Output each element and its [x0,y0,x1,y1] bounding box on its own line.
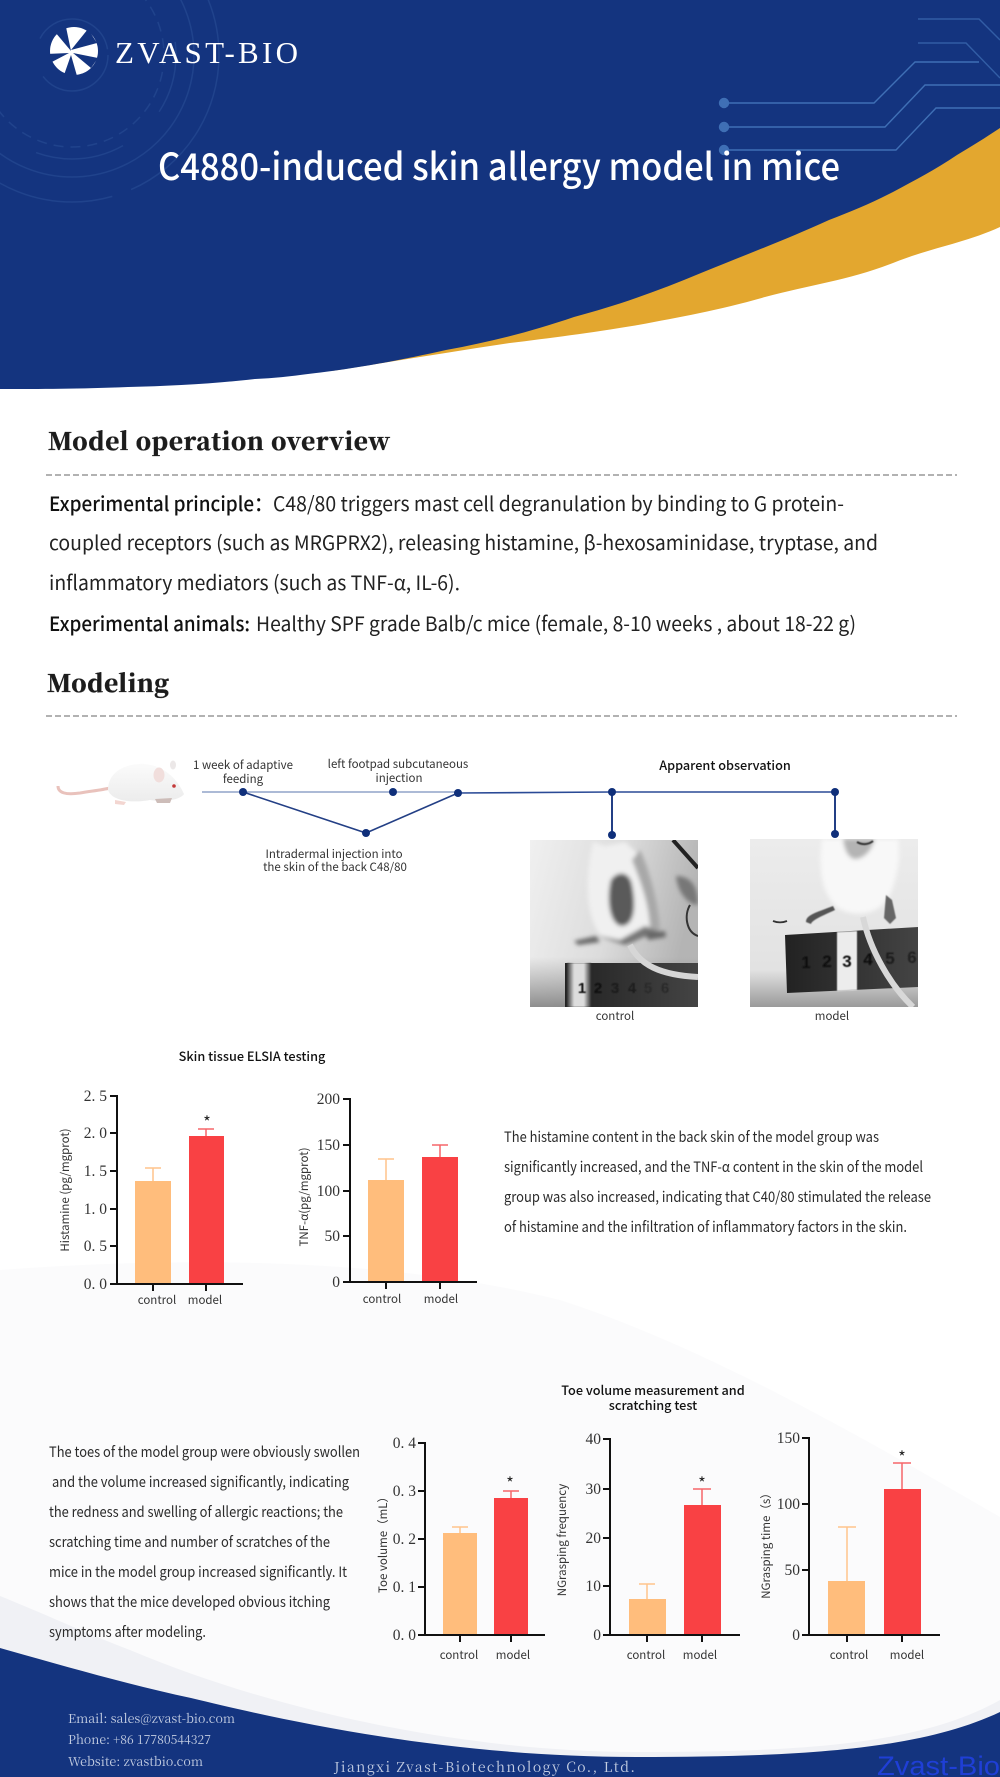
bar chart: toe volume: 0. 3 [393,1483,416,1500]
text block: experimental principle: coupled receptors (such as MRGPRX2), releasing histamine, β-hexosaminidase, tryptase, and [49,527,878,556]
bar chart: toe volume: control [440,1647,478,1663]
ruler numbers: 3 [611,980,619,997]
bar chart: grasping frequency: 30 [586,1481,601,1498]
header banner [0,0,1000,389]
text block: ELISA findings: The histamine content in the back skin of the model group was [504,1126,879,1147]
heading: toe volume and scratching [561,1380,745,1414]
ruler numbers: 5 [644,980,652,997]
heading: toe volume and scratching: Toe volume measurement and [561,1380,745,1399]
bar chart: TNF-alpha: model [424,1291,458,1307]
page background hill [0,1262,1000,1777]
text block: toe findings: symptoms after modeling. [49,1621,206,1642]
bar chart: grasping time: model [890,1647,924,1663]
bar chart: toe volume: Toe volume（mL） [375,1491,391,1593]
text block: toe findings: The toes of the model group were obviously swollen [49,1441,360,1462]
bar chart: grasping frequency: model [683,1647,717,1663]
gold swoosh [332,128,1000,371]
ruler numbers: 3 [842,952,852,971]
text block: toe findings [49,1441,360,1642]
timeline label: footpad injection [328,756,468,786]
bar chart: TNF-alpha: 200 [317,1091,340,1108]
bar chart: histamine: Histamine (pg/mgprot) [57,1128,73,1252]
ruler numbers: 2 [822,952,832,971]
ruler numbers: 2 [594,980,602,997]
timeline label: adaptive feeding [193,757,293,787]
photo: control mouse [530,840,698,1007]
text block: toe findings: mice in the model group increased significantly. It [49,1561,347,1582]
text block: ELISA findings [504,1126,931,1237]
bar chart: histamine: model [188,1292,222,1308]
heading: modeling: Modeling [47,664,169,699]
bar chart: histamine [57,1088,243,1308]
timeline label: footpad injection: left footpad subcutaneous [328,756,468,772]
ruler numbers: 4 [863,950,873,969]
caption: control: control [596,1008,634,1024]
bar chart: grasping frequency: * [698,1470,706,1494]
ruler numbers: 6 [661,980,669,997]
bar chart: TNF-alpha: control [363,1291,401,1307]
ruler numbers: 1 [801,953,811,972]
timeline label: adaptive feeding: 1 week of adaptive [193,757,293,773]
footer contact details: Phone: +86 17780544327 [68,1730,211,1748]
text block: experimental principle [49,488,878,596]
bar chart: grasping time [758,1430,940,1663]
bar chart: grasping time: 100 [777,1496,800,1513]
bar chart: toe volume: 0. 4 [393,1435,416,1452]
bar chart: toe volume: 0. 0 [393,1627,416,1644]
ruler numbers: 5 [885,949,895,968]
footer company name: Jiangxi Zvast-Biotechnology Co., Ltd. [333,1757,635,1777]
bar chart: toe volume [375,1435,545,1663]
text block: toe findings: shows that the mice developed obvious itching [49,1591,330,1612]
timeline label: intradermal injection: Intradermal injection into [265,846,403,862]
bar chart: grasping frequency: NGrasping frequency [554,1484,570,1596]
text block: ELISA findings: group was also increased, indicating that C40/80 stimulated the release [504,1186,931,1207]
timeline label: adaptive feeding: feeding [223,771,264,787]
logo icon [46,27,98,76]
bar chart: grasping time: NGrasping time（s） [758,1487,774,1599]
bar chart: grasping frequency: 40 [586,1431,601,1448]
bar chart: grasping time: * [898,1444,906,1468]
text block: toe findings: the redness and swelling of allergic reactions; the [49,1501,343,1522]
icon: white mouse [58,760,184,805]
ruler numbers: 1 [578,980,586,997]
bar chart: histamine: 1. 0 [84,1201,107,1218]
bar chart: toe volume: 0. 1 [393,1579,416,1596]
text block: experimental principle: inflammatory mediators (such as TNF-α, IL-6). [49,567,460,596]
bar chart: TNF-alpha: TNF-α(pg/mgprot) [296,1148,312,1246]
bar chart: grasping frequency: 10 [586,1578,601,1595]
bar chart: TNF-alpha [296,1091,477,1307]
header decorative rings [0,0,219,202]
bar chart: TNF-alpha: 100 [317,1183,340,1200]
bar chart: grasping time: 50 [784,1562,800,1579]
bar chart: histamine: control [138,1292,176,1308]
bar chart: histamine: 2. 0 [84,1125,107,1142]
bar chart: grasping frequency: 20 [586,1530,601,1547]
bar chart: TNF-alpha: 50 [324,1228,340,1245]
ruler numbers [578,982,669,994]
logo wordmark: ZVAST-BIO [115,35,298,70]
ruler numbers: 4 [628,980,637,997]
footer contact details [68,1709,235,1770]
bar chart: histamine: * [203,1109,211,1133]
timeline label: intradermal injection [263,846,407,875]
text block: experimental animals: Experimental animals: [49,608,250,637]
title: C4880-induced skin allergy model in mice [158,137,840,191]
caption: model: model [815,1008,849,1024]
ruler numbers: 6 [907,948,917,967]
footer contact details: Website: zvastbio.com [68,1752,203,1770]
bar chart: histamine: 0. 0 [84,1276,107,1293]
heading: skin tissue ELISA testing: Skin tissue ELSIA testing [179,1046,326,1065]
heading: model operation overview: Model operation overview [48,422,391,457]
bar chart: TNF-alpha: 150 [317,1137,340,1154]
bar chart: histamine: 1. 5 [84,1163,107,1180]
bar chart: grasping time: 0 [792,1627,800,1644]
timeline [202,788,839,839]
bar chart: TNF-alpha: 0 [332,1274,340,1291]
text block: experimental animals: Healthy SPF grade Balb/c mice (female, 8-10 weeks , about 18-22 g) [256,608,856,637]
photo: model mouse [750,839,918,1007]
heading: toe volume and scratching: scratching test [609,1395,697,1414]
heading: apparent observation: Apparent observation [659,755,791,774]
timeline label: intradermal injection: the skin of the back C48/80 [263,859,407,875]
footer band [0,1596,1000,1777]
text block: toe findings: scratching time and number of scratches of the [49,1531,330,1552]
text block: experimental principle: C48/80 triggers mast cell degranulation by binding to G protein- [273,488,844,517]
bar chart: grasping time: control [830,1647,868,1663]
bar chart: grasping time: 150 [777,1430,800,1447]
text block: ELISA findings: of histamine and the infiltration of inflammatory factors in the skin. [504,1216,907,1237]
bar chart: toe volume: 0. 2 [393,1531,416,1548]
timeline label: footpad injection: injection [376,770,422,786]
bar chart: histamine: 2. 5 [84,1088,107,1105]
circuit lines [720,19,1000,154]
bar chart: grasping frequency: 0 [593,1627,601,1644]
text block: toe findings: and the volume increased significantly, indicating [52,1471,349,1492]
text block: experimental principle: Experimental principle： [49,488,273,517]
ruler numbers [802,951,916,968]
bar chart: histamine: 0. 5 [84,1238,107,1255]
bar chart: grasping frequency [554,1431,740,1663]
bar chart: toe volume: model [496,1647,530,1663]
bar chart: toe volume: * [506,1470,514,1494]
text block: ELISA findings: significantly increased, and the TNF-α content in the skin of the model [504,1156,923,1177]
bar chart: grasping frequency: control [627,1647,665,1663]
footer contact details: Email: sales@zvast-bio.com [68,1709,235,1727]
